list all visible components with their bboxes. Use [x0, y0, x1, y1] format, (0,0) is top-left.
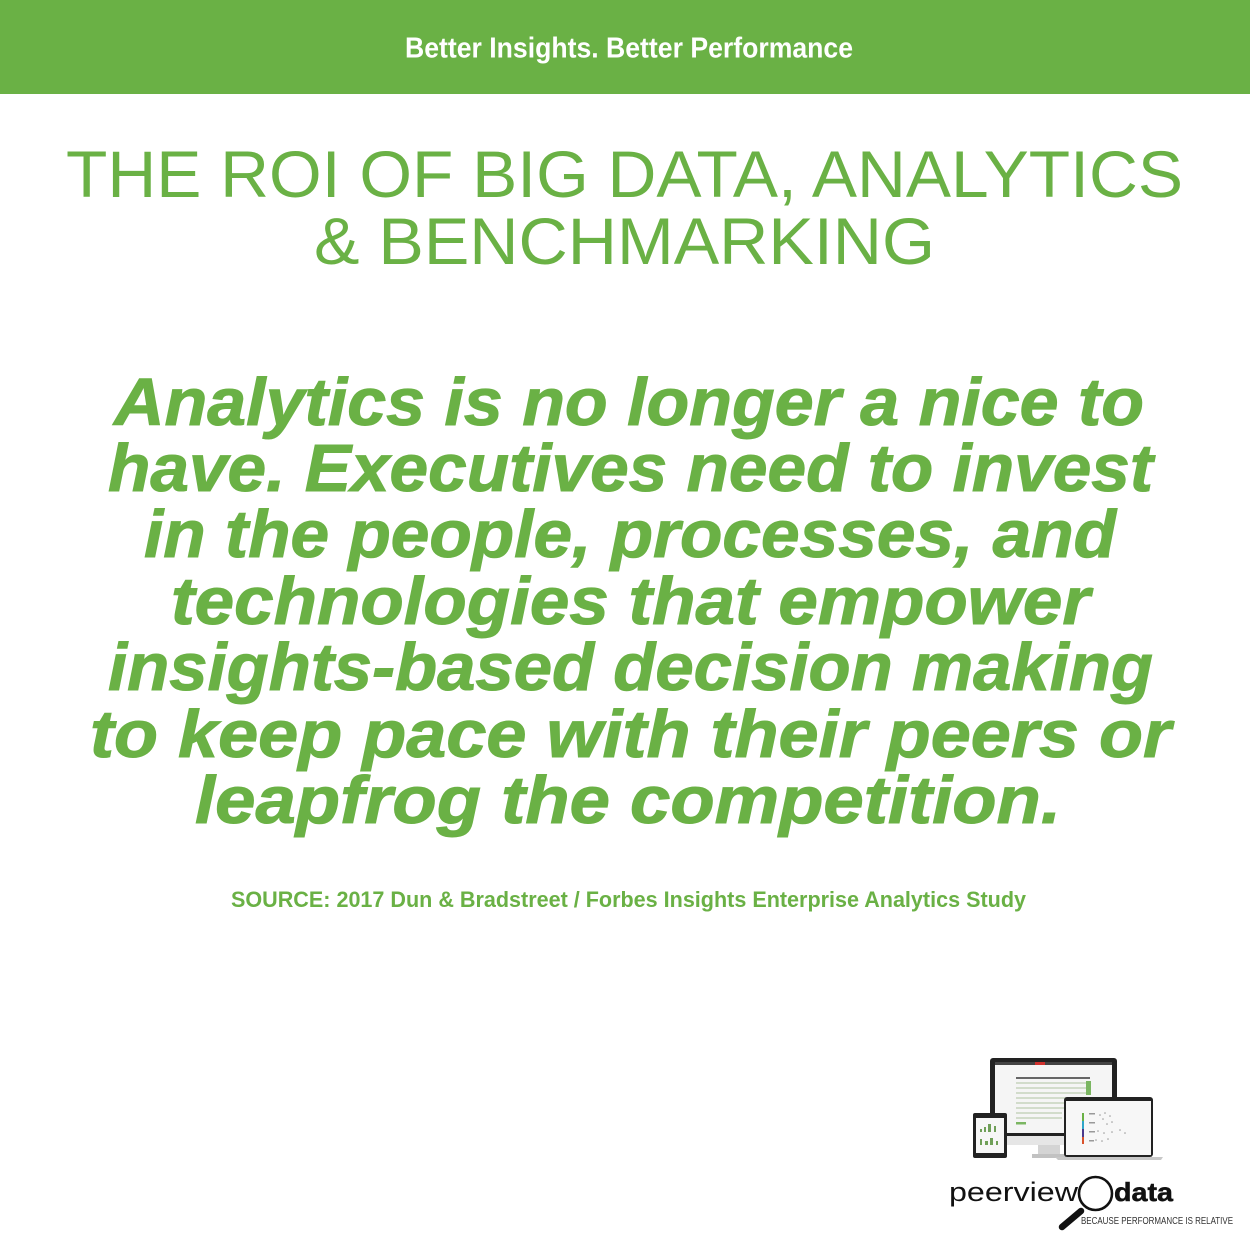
- quote text: Analytics is no longer a nice to: [112, 365, 1144, 440]
- quote text: have. Executives need to invest: [108, 431, 1156, 506]
- source citation: SOURCE: 2017 Dun & Bradstreet / Forbes Insights Enterprise Analytics Study: [231, 887, 1027, 912]
- quote text: insights-based decision making: [108, 630, 1153, 705]
- quote text: technologies that empower: [171, 564, 1094, 639]
- title: THE ROI OF BIG DATA, ANALYTICS: [66, 137, 1183, 211]
- icon: laptop: [1055, 1097, 1163, 1160]
- quote text: leapfrog the competition.: [195, 763, 1061, 838]
- peerview data logo: [949, 1177, 1233, 1227]
- quote text: in the people, processes, and: [144, 497, 1118, 572]
- header banner: [0, 0, 1250, 94]
- quote text: [90, 365, 1175, 838]
- icon: magnifying glass: [1062, 1177, 1112, 1227]
- icon: tablet: [973, 1113, 1007, 1158]
- logo wordmark: peerview: peerview: [949, 1177, 1079, 1207]
- title: [66, 137, 1183, 278]
- title: & BENCHMARKING: [314, 204, 935, 278]
- logo wordmark: data: data: [1114, 1177, 1174, 1207]
- header tagline: Better Insights. Better Performance: [405, 32, 853, 64]
- icon: desktop monitor: [990, 1058, 1117, 1158]
- quote text: to keep pace with their peers or: [90, 697, 1175, 772]
- device mockups: [973, 1058, 1163, 1160]
